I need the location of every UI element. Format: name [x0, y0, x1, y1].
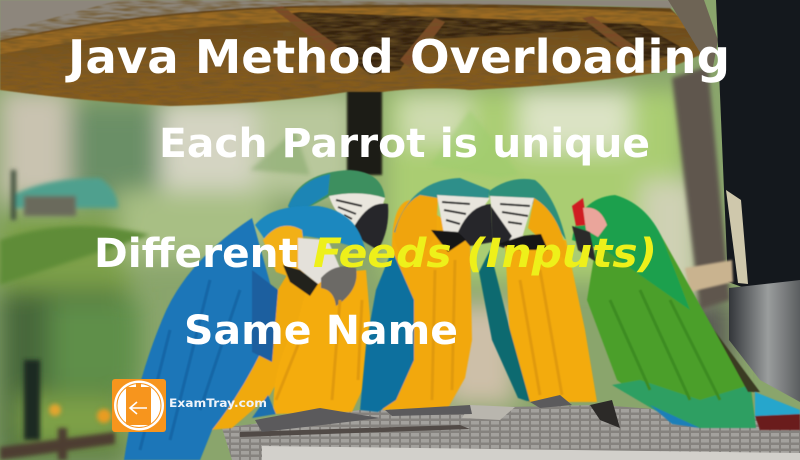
- line: same name: Same Name: [184, 308, 458, 354]
- parrot 4: right macaw: [479, 179, 597, 402]
- thatched roof: [0, 0, 720, 110]
- umbrella pole: [347, 70, 382, 175]
- line: different feeds (inputs): [94, 231, 657, 277]
- tree branch above the post: [668, 0, 718, 72]
- dark right post: [716, 0, 800, 288]
- parrot 1: back macaw: [288, 170, 388, 250]
- parrot 2: front-left macaw: [124, 206, 378, 460]
- background details: green hut, fence, posts: [0, 110, 520, 460]
- metal post base: [729, 280, 800, 402]
- title: Java Method Overloading: [65, 30, 730, 84]
- subtitle: each parrot is unique: Each Parrot is unique: [159, 121, 650, 167]
- tree trunk: [672, 66, 730, 310]
- parrot claws on perch: [255, 395, 572, 432]
- parrot 5: green macaw: [572, 195, 800, 430]
- line: different feeds (inputs): Different: [94, 231, 298, 277]
- line: different feeds (inputs): Feeds (Inputs): [313, 231, 657, 277]
- parrot 3: centre macaw: [360, 178, 493, 412]
- logo wordmark: ExamTray.com: [169, 396, 267, 410]
- logo: ExamTray: [112, 379, 166, 432]
- perch platform: [222, 400, 800, 460]
- wooden rail: [685, 260, 733, 292]
